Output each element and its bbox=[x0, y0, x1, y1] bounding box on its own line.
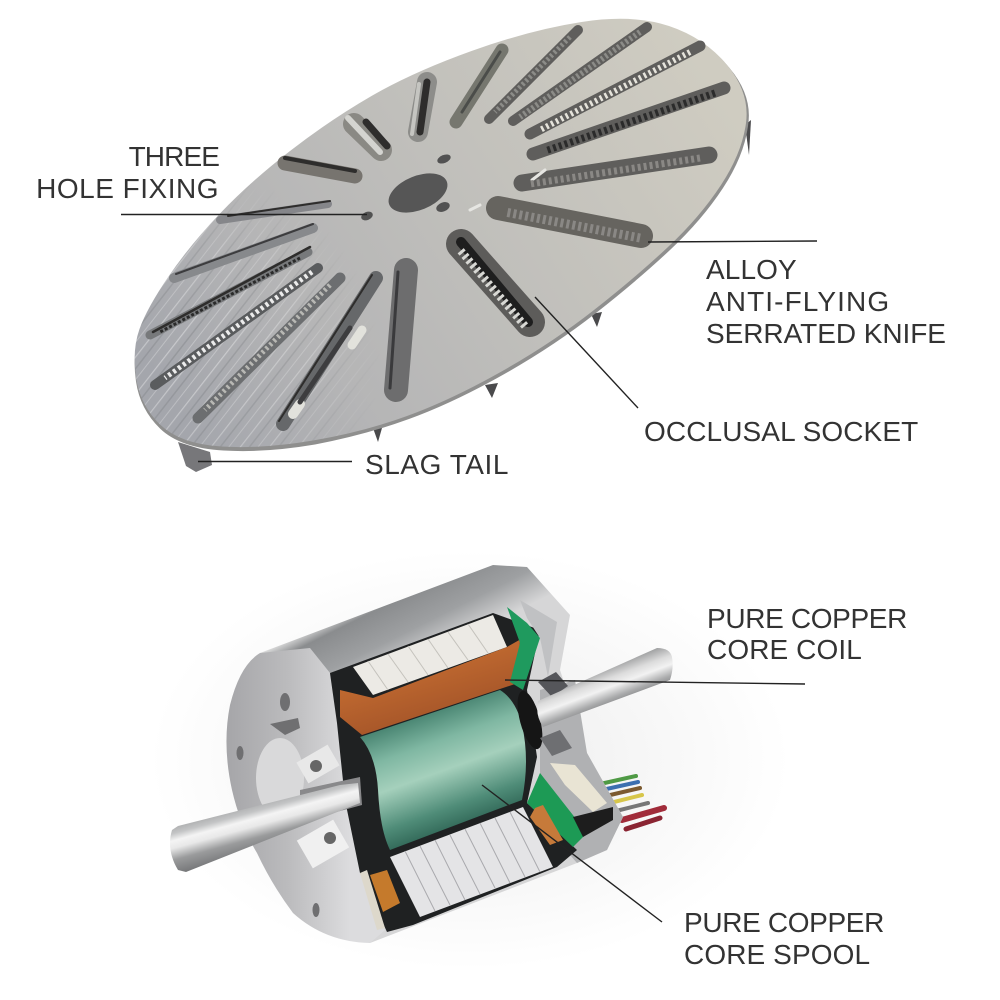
label: alloy anti-flying serrated knife: ALLOY bbox=[706, 254, 797, 285]
motor bbox=[150, 550, 790, 970]
label: alloy anti-flying serrated knife: SERRATED KNIFE bbox=[706, 318, 946, 349]
label: three hole fixing bbox=[36, 141, 219, 204]
connector black clip bbox=[573, 807, 613, 837]
slot bodies bbox=[150, 27, 724, 424]
label: pure copper core coil: PURE COPPER bbox=[707, 603, 907, 634]
front bearing ring bbox=[256, 738, 304, 818]
centre hole bbox=[383, 166, 453, 220]
housing lower right shell bbox=[540, 680, 623, 863]
fixing holes bbox=[360, 153, 452, 222]
copper coil bbox=[340, 630, 537, 735]
front face mounting holes bbox=[236, 693, 320, 917]
motor housing bbox=[260, 565, 623, 943]
motor front face bbox=[226, 648, 385, 943]
soft shadow bbox=[150, 550, 790, 970]
cutaway interior bbox=[330, 613, 577, 932]
leader lines bbox=[121, 214, 817, 922]
label: slag tail: SLAG TAIL bbox=[365, 449, 509, 480]
connector bbox=[550, 763, 607, 812]
slot highlights and dark recesses bbox=[153, 52, 528, 421]
green rotor bbox=[360, 690, 526, 850]
green insulator lower bbox=[527, 773, 587, 847]
label: alloy anti-flying serrated knife bbox=[706, 254, 946, 349]
blade disc bbox=[134, 18, 751, 472]
left shaft bbox=[170, 783, 360, 872]
spool copper bbox=[530, 805, 563, 845]
disc surface bbox=[135, 19, 747, 447]
serrated teeth bbox=[160, 32, 715, 410]
cable bundle bbox=[600, 776, 664, 829]
label: three hole fixing: HOLE FIXING bbox=[36, 173, 219, 204]
left copper spool bbox=[370, 870, 400, 912]
label: pure copper core spool: CORE SPOOL bbox=[684, 939, 870, 970]
green insulator upper bbox=[507, 607, 540, 690]
slots bbox=[150, 27, 724, 424]
right bearing parts bbox=[513, 672, 572, 756]
upper laminate stack bbox=[353, 615, 507, 695]
lower laminate lines bbox=[405, 812, 540, 911]
label: occlusal socket: OCCLUSAL SOCKET bbox=[644, 416, 918, 447]
label: pure copper core spool: PURE COPPER bbox=[684, 907, 884, 938]
inner housing wall bbox=[520, 600, 557, 677]
label: pure copper core coil bbox=[707, 603, 907, 665]
slag tail pins bbox=[178, 120, 751, 472]
label: pure copper core coil: CORE COIL bbox=[707, 634, 862, 665]
label: alloy anti-flying serrated knife: ANTI-FLYING bbox=[706, 286, 890, 317]
label: three hole fixing: THREE bbox=[129, 141, 219, 172]
right shaft bbox=[537, 648, 673, 727]
lower laminate stack bbox=[390, 807, 553, 917]
label: pure copper core spool bbox=[684, 907, 884, 970]
shaft base bbox=[300, 777, 362, 822]
upper laminate lines bbox=[368, 624, 488, 690]
disc edge bbox=[135, 23, 749, 451]
cream insulation strip bbox=[360, 870, 385, 930]
left bearing balls bbox=[296, 745, 349, 868]
